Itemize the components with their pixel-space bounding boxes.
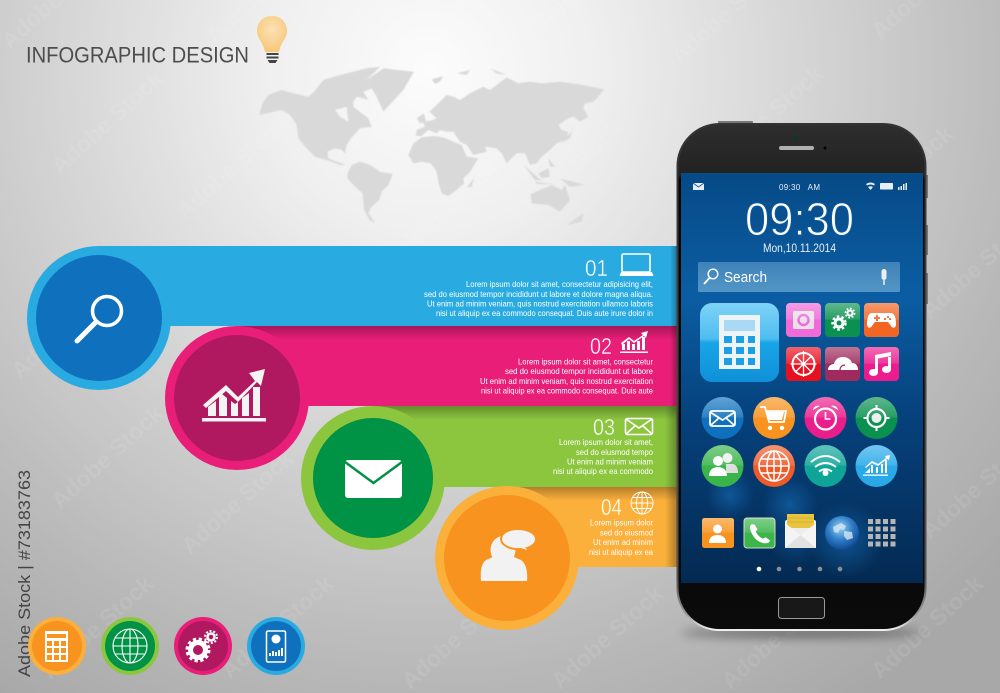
watermarks: Adobe Stock <box>706 60 828 174</box>
panel: band 02 pink <box>237 326 677 406</box>
circle: people orange <box>435 486 579 630</box>
text block 01: sed do eiusmod tempor incididunt ut labore et dolore magna aliqua. <box>424 289 653 299</box>
icon: cloud app <box>825 347 860 381</box>
watermarks: Adobe Stock <box>211 240 333 354</box>
watermarks: Adobe Stock <box>716 580 838 693</box>
text block 04 <box>589 518 653 557</box>
status bar <box>693 182 907 192</box>
page dots <box>757 567 842 571</box>
icon: settings app <box>825 303 860 337</box>
text block 01: nisi ut aliquip ex ea commodo consequat. Duis aute irure dolor in <box>436 308 653 318</box>
icon: target app <box>856 397 898 439</box>
phone <box>678 121 928 638</box>
watermarks: Adobe Stock <box>171 110 293 224</box>
watermarks: Adobe Stock <box>216 570 338 684</box>
circle: growth chart pink <box>165 326 309 470</box>
text block 02: Lorem ipsum dolor sit amet, consectetur <box>518 356 653 366</box>
text block 03: Ut enim ad minim veniam <box>567 456 653 466</box>
text block 02: Ut enim ad minim veniam, quis nostrud exercitation <box>480 376 653 386</box>
icon: wifi app <box>804 445 846 487</box>
icon: compass app <box>786 347 821 381</box>
watermarks: Adobe Stock <box>866 570 988 684</box>
text block 04: nisi ut aliquip ex ea <box>589 547 653 557</box>
phone side buttons <box>718 121 928 304</box>
watermarks: Adobe Stock <box>836 120 958 234</box>
text block 01: Lorem ipsum dolor sit amet, consectetur adipisicing elit, <box>466 279 653 289</box>
text block 02 <box>480 356 653 396</box>
text block 02: sed do eiusmod tempor incididunt ut labore <box>505 366 653 376</box>
panel: band 04 orange <box>507 487 677 567</box>
icon: game controller app <box>864 303 899 337</box>
text block 03: sed do eiusmod tempo <box>576 447 653 457</box>
text block 03: Lorem ipsum dolor sit amet, <box>559 437 653 447</box>
number 02: 02 <box>590 333 612 359</box>
icon: growth chart small <box>620 331 648 353</box>
world map <box>260 67 604 225</box>
watermarks: Adobe Stock <box>46 400 168 514</box>
icon: tablet chart badge <box>247 617 305 675</box>
title: INFOGRAPHIC DESIGN <box>26 42 249 68</box>
icon: chart app <box>856 445 898 487</box>
text block 03: nisi ut aliquip ex ea commodo <box>553 466 653 476</box>
screen bokeh <box>706 471 883 578</box>
phone shadow <box>681 628 921 638</box>
icon: light bulb <box>257 16 287 63</box>
date: Mon,10.11.2014 <box>763 243 837 255</box>
panel: band 01 blue <box>99 246 677 326</box>
icon: contacts app <box>702 445 744 487</box>
watermarks: Adobe Stock <box>506 115 628 229</box>
icon: mail app <box>702 397 744 439</box>
circle: magnifier blue <box>27 246 171 390</box>
icon: globe badge <box>101 617 159 675</box>
icon: profile dock app <box>702 518 734 548</box>
number 04: 04 <box>601 494 622 520</box>
icon: cart app <box>753 397 795 439</box>
home button <box>778 598 824 618</box>
icon: phone dock app <box>744 518 775 548</box>
status bar: 09:30 AM <box>779 183 820 192</box>
text block 04: Ut enim ad minim <box>593 537 653 547</box>
watermarks: Adobe Stock <box>546 580 668 693</box>
text block 03 <box>553 437 653 476</box>
text block 04: Lorem ipsum dolor <box>590 518 653 528</box>
circle: envelope green <box>301 406 445 550</box>
icon: app grid <box>868 519 896 546</box>
watermarks: Adobe Stock <box>526 490 648 604</box>
text block 04: sed do eiusmod <box>600 528 653 538</box>
icon: laptop <box>620 254 654 276</box>
number 01: 01 <box>585 255 608 281</box>
watermarks: Adobe Stock <box>6 270 128 384</box>
icon: globe small <box>631 492 653 514</box>
icon: web app <box>753 445 795 487</box>
text block 01 <box>424 279 653 318</box>
icon: calculator badge <box>28 617 86 675</box>
watermarks: Adobe Stock <box>176 445 298 559</box>
watermarks: Adobe Stock <box>381 410 503 524</box>
watermarks: Adobe Stock <box>396 580 518 693</box>
watermarks: Adobe Stock <box>381 155 503 269</box>
text block 01: Ut enim ad minim veniam, quis nostrud exercitation ullamco laboris <box>427 298 653 308</box>
icon: earth dock app <box>825 516 859 550</box>
phone body <box>678 124 926 630</box>
watermark caption: Adobe Stock | #73183763 <box>15 470 34 677</box>
clock: 09:30 <box>745 193 854 245</box>
icon: envelope dock app <box>785 514 816 548</box>
text block 02: nisi ut aliquip ex ea commodo consequat. Duis aute <box>481 386 653 396</box>
watermarks: Adobe Stock <box>36 570 158 684</box>
search bar <box>698 262 900 292</box>
icon: alarm clock app <box>804 397 846 439</box>
watermarks: Adobe Stock <box>46 65 168 179</box>
icon: gears badge <box>174 617 232 675</box>
watermarks: Adobe Stock <box>326 50 448 164</box>
number 03: 03 <box>593 414 615 440</box>
icon: envelope small <box>626 418 652 434</box>
icon: camera app <box>786 303 821 337</box>
speaker and camera <box>779 135 826 150</box>
icon: calculator app <box>700 303 779 382</box>
screen <box>681 173 923 583</box>
panel: band 03 green <box>373 406 677 487</box>
search bar: Search <box>724 269 767 286</box>
icon: music app <box>864 347 899 381</box>
